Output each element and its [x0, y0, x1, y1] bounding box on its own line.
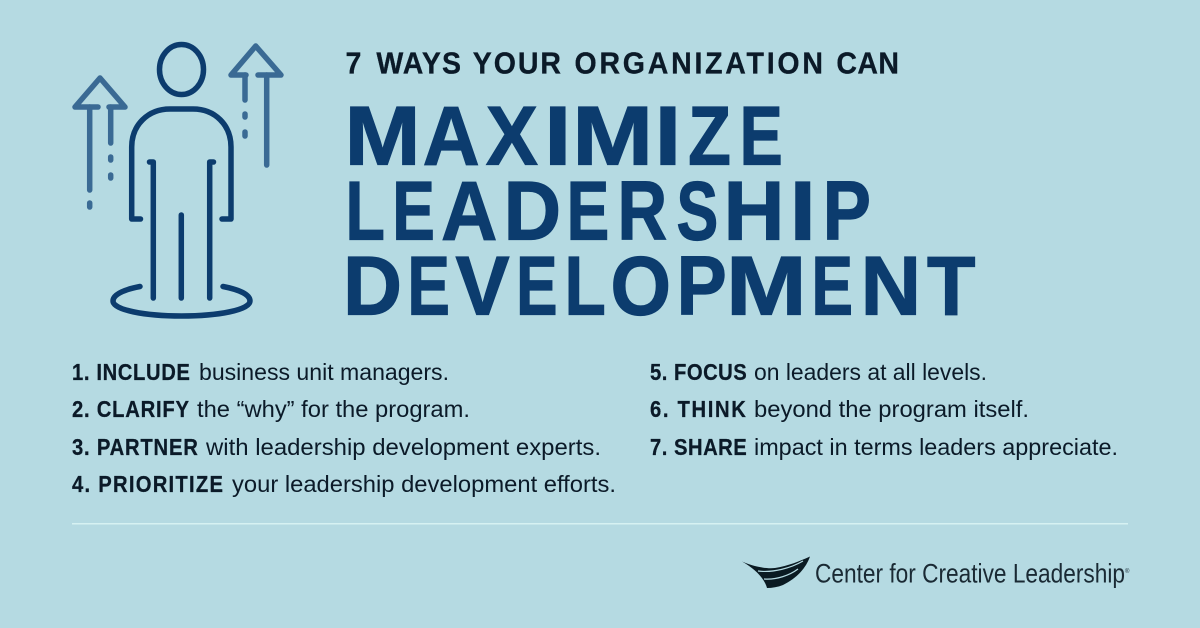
item 7: 7. SHARE — [650, 434, 747, 460]
heading: main title: O — [610, 239, 671, 333]
heading: kicker: CAN — [836, 46, 899, 81]
item 4: 4. PRIORITIZE — [72, 471, 223, 497]
icon: person with rising arrows — [75, 44, 281, 316]
item 2: the “why” for the program. — [197, 396, 470, 422]
heading: main title: E — [392, 164, 435, 258]
item 1: business unit managers. — [199, 359, 449, 385]
item 5 — [650, 359, 987, 385]
heading: main title: D — [504, 164, 561, 258]
heading: main title: L — [345, 164, 385, 258]
heading: main title: M — [345, 89, 420, 183]
item 2: 2. CLARIFY — [72, 396, 190, 422]
heading: main title: M — [572, 89, 653, 183]
heading: main title: H — [723, 164, 784, 258]
item 1 — [72, 359, 449, 385]
list: items 5 to 7 — [650, 359, 1118, 460]
heading: kicker: YOUR — [473, 46, 561, 81]
heading: main title: A — [423, 89, 480, 183]
item 4 — [72, 471, 616, 497]
item 1: 1. INCLUDE — [72, 359, 190, 385]
list: items 1 to 4 — [72, 359, 616, 497]
heading: main title: E — [516, 239, 558, 333]
icon: left arrow — [75, 78, 125, 207]
heading: main title: Z — [688, 89, 731, 183]
heading: main title: P — [677, 239, 727, 333]
item 7: impact in terms leaders appreciate. — [754, 434, 1118, 460]
item 5: 5. FOCUS — [650, 359, 747, 385]
heading: main title: T — [927, 239, 975, 333]
icon: feather — [742, 556, 810, 588]
heading: main title: X — [486, 89, 538, 183]
item 2 — [72, 396, 470, 422]
heading: main title: L — [564, 239, 606, 333]
item 5: on leaders at all levels. — [754, 359, 987, 385]
heading: main title: E — [407, 239, 450, 333]
item 6: 6. THINK — [650, 396, 746, 422]
heading: main title — [343, 89, 975, 333]
logo wordmark: Center for Creative Leadership — [815, 559, 1125, 589]
heading: kicker: WAYS — [376, 46, 461, 81]
heading: kicker: 7 — [345, 46, 361, 81]
item 4: your leadership development efforts. — [232, 471, 616, 497]
registered mark: ® — [1125, 568, 1130, 575]
item 3: 3. PARTNER — [72, 434, 198, 460]
heading: main title: M — [726, 239, 807, 333]
heading: main title: S — [676, 164, 718, 258]
heading: main title: V — [455, 239, 510, 333]
heading: main title: P — [823, 164, 871, 258]
item 6 — [650, 396, 1029, 422]
heading: main title: I — [544, 89, 571, 183]
icon: person — [113, 44, 250, 316]
logo: Center for Creative Leadership — [742, 556, 1130, 589]
heading: main title: E — [567, 164, 609, 258]
icon: right arrow — [231, 46, 281, 165]
heading: main title: I — [790, 164, 816, 258]
heading: main title: I — [655, 89, 681, 183]
heading: main title: A — [441, 164, 497, 258]
heading: main title: N — [861, 239, 921, 333]
heading: main title: E — [812, 239, 853, 333]
heading: main title: D — [343, 239, 402, 333]
heading: main title: E — [740, 89, 783, 183]
item 3: with leadership development experts. — [205, 434, 601, 460]
item 6: beyond the program itself. — [754, 396, 1029, 422]
heading: main title: R — [617, 164, 667, 258]
heading: kicker: ORGANIZATION — [575, 46, 823, 81]
